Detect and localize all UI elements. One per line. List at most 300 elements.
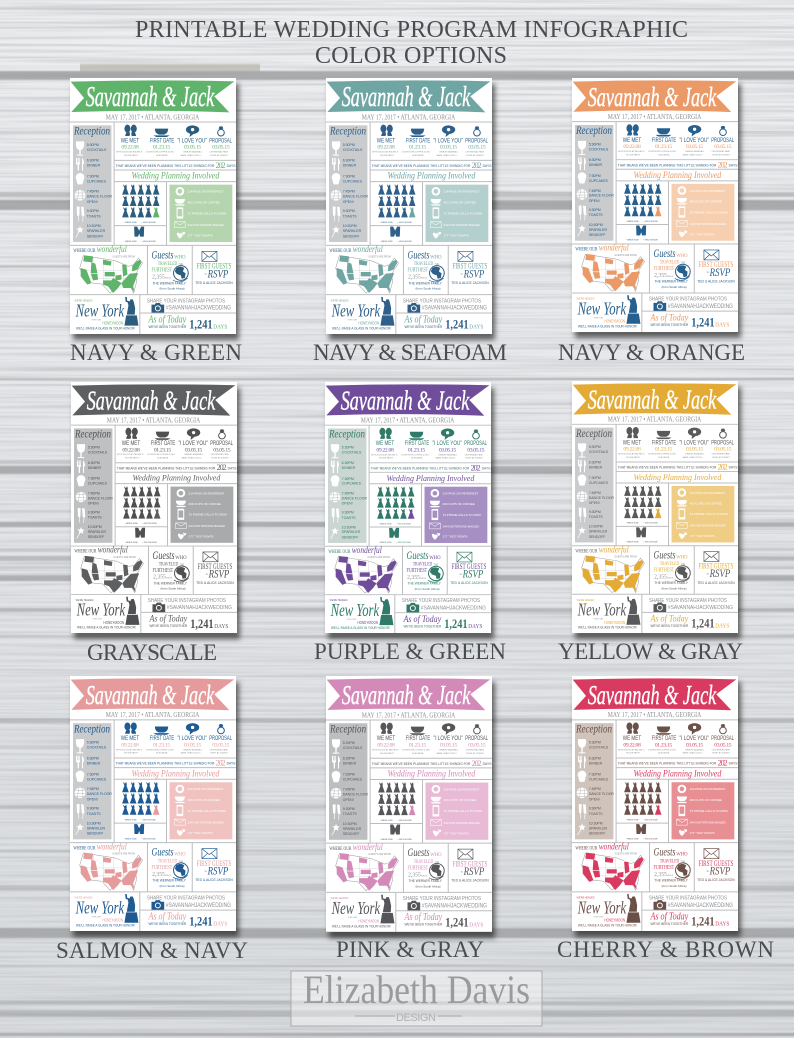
chart: groomsmen [125,528,157,544]
panel: planning stats: 177 "YES" RSVPS [689,831,714,835]
heading: wedding planning involved: Wedding Planning Involved [633,768,721,778]
days together: As of Today [649,911,688,922]
honeymoon [576,295,640,329]
panel: planning stats: 73 PHONE CALLS TO MOM [690,512,728,516]
panel: reception schedule: 5:30PM [343,741,355,745]
honeymoon: New York [330,600,380,620]
milestones: CENTENNIAL PARK [209,151,228,154]
panel: reception schedule [575,125,614,241]
chart: groomsmen: • BRIDE SIDE [125,542,138,544]
panel: reception schedule: SPARKLER [87,530,106,534]
panel: reception schedule: DINNER [341,466,355,470]
days together [403,314,483,332]
map: where guests are from: wonderful [97,546,128,556]
honeymoon: WE'LL RAISE A GLASS IN YOUR HONOR! [578,325,637,329]
milestones: FIRST DATE [151,440,175,447]
panel: reception schedule: DINNER [588,163,602,167]
panel: reception schedule: CUPCAKES [86,777,106,781]
panel: reception schedule: 10:30PM [588,223,602,227]
shindig countdown line: 202 [216,463,226,472]
panel: planning stats: 400 CUPS OF COFFEE [187,200,219,204]
guests who travelled furthest: Guests [151,249,173,261]
chart: groomsmen [124,824,156,840]
milestones: 01.23.15 [408,447,425,453]
panel: reception schedule: TOASTS [341,515,356,519]
days together [147,314,227,332]
milestones: DOWNTOWN COFFEE & DELI [146,749,174,751]
honeymoon: New York [577,600,627,620]
panel: reception schedule: DANCE FLOOR [589,496,614,500]
heading: wedding planning involved: Wedding Planning Involved [132,473,220,483]
guests who travelled furthest: Guests [152,550,175,562]
panel: reception schedule: 7:30PM [342,175,355,179]
first guests to RSVP [196,552,233,585]
milestones: RIGHT AT SUNSET [712,456,731,459]
guests who travelled furthest [407,847,444,888]
milestones: "I LOVE YOU" [434,735,463,742]
panel: reception schedule: 9:30PM [342,209,355,213]
guests who travelled furthest: FURTHEST [151,865,172,871]
first guests to RSVP: RSVP [709,566,730,580]
instagram [649,297,733,311]
panel: reception schedule: 6:30PM [589,460,601,464]
honeymoon: to [80,602,83,606]
chart: groomsmen: • BRIDE SIDE [626,541,639,543]
days together: WE'VE BEEN TOGETHER [650,323,688,327]
panel: reception schedule: DINNER [343,762,357,766]
map: where guests are from [329,244,398,293]
days together: DAYS [469,324,483,331]
guests who travelled furthest: 2,355 [408,274,421,281]
guests who travelled furthest: (from South Africa) [661,285,686,289]
guests who travelled furthest: THE WERNER FAMILY [152,281,186,285]
chart: bridesmaids: • BRIDE SIDE [124,819,137,821]
milestones: CENTENNIAL PARK [210,453,229,456]
honeymoon: WE'RE HEADED [330,299,348,302]
milestones: CENTENNIAL PARK [711,150,730,153]
milestones: 03.05.15 [714,447,732,453]
guests who travelled furthest [152,550,189,591]
milestones: RIGHT AT SUNSET [712,752,730,755]
chart: groomsmen: • GROOM SIDE [643,240,658,242]
card: cherry and brown [572,676,738,931]
panel: planning stats: 400 CUPS OF COFFEE [444,798,476,802]
panel: reception schedule: COCKTAILS [86,746,106,750]
days together: WE'VE BEEN TOGETHER [404,325,442,329]
panel: reception schedule: 7:45PM [86,787,98,791]
guests who travelled furthest: Guests [151,847,173,859]
panel: reception schedule: 5:30PM [87,446,100,450]
honeymoon: WE'RE HEADED [576,298,594,301]
milestones: CENTENNIAL PARK [466,749,485,752]
map: where guests are from [329,842,398,891]
panel: reception schedule: SENDOFF [87,535,104,539]
milestones: BRAVES BASEBALL [440,749,459,752]
milestones: CENTENNIAL PARK [464,453,483,456]
chart: groomsmen: • GROOM SIDE [643,541,658,543]
milestones: WE MET [622,735,641,742]
guests who travelled furthest [406,550,443,590]
days together: As of Today [147,911,186,922]
panel: reception schedule: 5:30PM [588,142,601,146]
first guests to RSVP: RSVP [463,864,485,878]
chart: bridesmaids: • GROOM SIDE [142,523,157,525]
first guests to RSVP [697,849,734,882]
map: where guests are from [328,546,397,593]
panel: reception schedule: 9:30PM [343,807,355,811]
panel: reception schedule [74,428,113,543]
panel: reception schedule: TOASTS [342,214,357,218]
panel: reception schedule: Reception [329,126,366,138]
milestones: 03.05.15 [468,743,486,749]
days together: WE'VE BEEN TOGETHER [148,325,186,329]
milestones: HOUSE PARTY [124,154,138,157]
panel: reception schedule: CUPCAKES [87,482,107,486]
guests who travelled furthest: THE [178,264,183,266]
panel: reception schedule: COCKTAILS [341,450,362,454]
milestones: RIGHT AT SUNSET [210,154,228,157]
honeymoon: WE'LL RAISE A GLASS IN YOUR HONOR! [76,924,134,928]
panel: planning stats: 214 PINS ON PINTEREST [442,491,478,495]
guests who travelled furthest: THE WERNER FAMILY [654,280,688,284]
guests who travelled furthest: THE [178,861,183,863]
days together: 1,241 [189,318,212,332]
guests who travelled furthest: TRAVELED [414,859,433,865]
heading: wedding planning involved: Wedding Planning Involved [386,473,474,482]
milestones: GAME, SEATS 228-14 [180,752,201,755]
days together: 1,241 [190,617,213,631]
honeymoon: to [79,899,82,903]
honeymoon: WE'RE HEADED [329,599,347,602]
milestones: RIGHT AT SUNSET [465,456,483,459]
milestones [618,124,734,156]
milestones: DOWNTOWN COFFEE & DELI [648,454,676,455]
guests who travelled furthest: 2,355 [408,871,421,878]
milestones: BRAVES BASEBALL [183,151,203,154]
first guests to RSVP: RSVP [206,864,228,878]
chart: bridesmaids [624,184,661,223]
days together: As of Today [404,912,443,923]
milestones: "I LOVE YOU" [433,137,463,144]
shindig countdown line [617,759,738,768]
milestones: CENTENNIAL PARK [465,151,484,154]
guests who travelled furthest: (from South Africa) [160,587,185,591]
guests who travelled furthest: WHO [676,555,688,560]
guests who travelled furthest: Guests [653,847,676,859]
label: cherry and brown: CHERRY & BROWN [557,937,774,962]
panel: reception schedule: OPEN! [588,199,599,203]
panel: planning stats: 214 PINS ON PINTEREST [187,787,223,791]
milestones: FIRST DATE [406,735,431,742]
first guests to RSVP: to [706,270,709,274]
milestones: DOWNTOWN COFFEE & DELI [648,151,676,153]
days together: WE'VE BEEN TOGETHER [148,922,186,926]
milestones [117,428,233,459]
first guests to RSVP: to [707,572,709,576]
milestones [116,722,232,755]
guests who travelled furthest: MILES [166,578,173,580]
panel: reception schedule: COCKTAILS [343,746,363,750]
milestones: 03.05.15 [686,742,703,748]
guests who travelled furthest: WHO [430,254,441,260]
panel: reception schedule: 5:30PM [341,445,354,449]
milestones: 01.23.15 [655,742,672,748]
milestones: WE MET [375,440,394,447]
shindig countdown line: DAYS [226,762,236,766]
days together: DAYS [213,921,227,928]
panel: planning stats [426,783,488,840]
panel: reception schedule: TOASTS [86,214,101,218]
first guests to RSVP: RSVP [206,266,228,280]
panel: planning stats [672,486,734,542]
panel: planning stats: 177 "YES" RSVPS [442,534,467,538]
days together [148,614,228,631]
milestones: 01.23.15 [655,144,672,150]
honeymoon: HONEYMOON [358,918,379,923]
first guests to RSVP: RSVP [709,864,730,878]
milestones: 03.05.15 [440,743,457,749]
milestones: FIRST DATE [406,137,430,144]
milestones: IN ATLANTA [658,456,670,459]
milestones: 01.23.15 [152,742,170,748]
days together: DAYS [715,623,730,630]
panel: reception schedule: COCKTAILS [342,148,363,152]
chart: groomsmen: • GROOM SIDE [396,542,411,544]
chart: groomsmen [380,824,412,841]
panel: reception schedule: 9:30PM [588,208,601,212]
map: where guests are from: WHERE OUR [73,249,95,254]
honeymoon: FOR OUR [594,619,603,621]
guests who travelled furthest [653,248,690,289]
milestones: 03.05.15 [439,447,456,453]
panel: planning stats: 400 CUPS OF COFFEE [689,798,721,802]
honeymoon: FOR OUR [593,317,603,319]
guests who travelled furthest: Guests [406,550,429,562]
shindig countdown line [372,759,492,768]
milestones: WE MET [623,439,641,446]
panel: planning stats: 214 PINS ON PINTEREST [444,788,480,792]
instagram [403,896,487,910]
map: where guests are from: WHERE OUR [575,846,598,851]
instagram [148,598,232,612]
milestones: "I LOVE YOU" [178,440,208,447]
label: navy and green: NAVY & GREEN [70,340,242,365]
milestones: IN ATLANTA [157,456,169,459]
panel: reception schedule: OPEN! [342,200,353,204]
map: where guests are from: WHERE OUR [328,550,351,554]
milestones: HOUSE PARTY [125,456,140,459]
panel: reception schedule: Reception [74,429,111,441]
chart: groomsmen: • GROOM SIDE [142,542,157,544]
panel: planning stats: 244 INVITATIONS MAILED [188,524,225,528]
card: navy and seafoam [326,78,492,334]
date line: MAY 17, 2017 • ATLANTA, GEORGIA [361,112,455,121]
panel: reception schedule: SPARKLER [342,229,361,233]
days together: As of Today [147,314,186,325]
chart: bridesmaids: • GROOM SIDE [141,222,156,224]
honeymoon: WE'LL RAISE A GLASS IN YOUR HONOR! [331,626,390,630]
guests who travelled furthest: WHO [429,555,440,561]
panel: planning stats: 73 PHONE CALLS TO MOM [442,513,481,517]
logo: Elizabeth Davis Design: Elizabeth Davis [303,967,530,1012]
guests who travelled furthest: THE [680,861,685,863]
milestones: BRAVES BASEBALL [685,150,705,153]
shindig countdown line: 202 [717,160,727,169]
guests who travelled furthest: Guests [407,249,430,261]
days together: As of Today [148,614,187,625]
honeymoon: WE'LL RAISE A GLASS IN YOUR HONOR! [332,924,391,928]
days together [147,911,227,929]
honeymoon: FOR OUR [593,916,603,918]
days together [650,614,730,631]
days together: 1,241 [445,318,468,332]
milestones: GAME, SEATS 228-14 [180,154,201,157]
chart: bridesmaids: • BRIDE SIDE [626,523,639,525]
honeymoon: to [335,302,338,306]
honeymoon: FOR OUR [346,619,356,621]
panel: reception schedule: DANCE FLOOR [343,793,368,797]
milestones: "I LOVE YOU" [432,440,462,447]
milestones: 01.23.15 [409,743,426,749]
map: where guests are from: WHERE OUR [329,249,352,254]
milestones: FIRST DATE [652,439,677,446]
date line: MAY 17, 2017 • ATLANTA, GEORGIA [607,112,702,121]
milestones: WE MET [121,440,140,447]
honeymoon: New York [331,300,381,320]
honeymoon: WE'LL RAISE A GLASS IN YOUR HONOR! [77,626,136,630]
honeymoon: FOR OUR [91,916,101,918]
panel: reception schedule: 6:30PM [86,756,98,760]
panel: planning stats: 73 PHONE CALLS TO MOM [444,809,482,813]
guests who travelled furthest: (from South Africa) [416,884,441,888]
honeymoon: WE'RE HEADED [576,896,595,899]
chart: groomsmen [626,824,658,840]
guests who travelled furthest: WHO [676,852,687,858]
milestones: 09.22.08 [121,145,138,151]
panel: reception schedule: Reception [329,724,366,736]
instagram [146,298,231,313]
chart: bridesmaids: • GROOM SIDE [397,820,412,822]
panel: reception schedule: 7:45PM [86,190,98,194]
panel: reception schedule: COCKTAILS [588,147,609,151]
honeymoon: WE'LL RAISE A GLASS IN YOUR HONOR! [76,327,134,331]
milestones: IN ATLANTA [156,154,168,157]
map: where guests are from: WHERE OUR [74,550,97,555]
days together: DAYS [715,921,729,928]
milestones: IN ATLANTA [412,752,424,755]
panel: reception schedule: Reception [73,126,110,138]
chart: groomsmen: • BRIDE SIDE [124,838,137,840]
map: where guests are from: wonderful [599,545,629,555]
panel: reception schedule: 6:30PM [588,756,601,760]
guests who travelled furthest: Guests [653,550,676,561]
label: navy and orange: NAVY & ORANGE [558,340,745,365]
date line: MAY 17, 2017 • ATLANTA, GEORGIA [607,710,702,719]
milestones: INTRODUCED AT RACHEL'S [372,151,399,154]
panel: planning stats: 244 INVITATIONS MAILED [187,820,224,824]
panel: planning stats: 244 INVITATIONS MAILED [187,223,224,227]
panel: reception schedule: 10:30PM [343,822,357,826]
panel: reception schedule: 5:30PM [86,143,98,147]
honeymoon: New York [331,898,381,918]
chart: bridesmaids [624,782,661,821]
guests who travelled furthest: FURTHEST [151,268,172,274]
milestones: 09.22.08 [623,742,641,748]
guests who travelled furthest: TRAVELED [157,261,177,267]
days together: WE'VE BEEN TOGETHER [404,923,443,927]
card: grayscale [71,382,237,633]
panel: reception schedule: SENDOFF [342,234,359,238]
card: pink and gray [326,676,492,932]
milestones: WE MET [120,137,139,144]
panel: reception schedule: 9:30PM [589,510,601,514]
panel: reception schedule: TOASTS [87,516,102,520]
map: where guests are from: WHERE OUR [329,847,352,852]
heading: wedding planning involved: Wedding Planning Involved [633,170,721,180]
milestones: HOUSE PARTY [626,456,641,459]
honeymoon: WE'RE HEADED [74,896,92,899]
milestones: HOUSE PARTY [626,153,641,156]
chart: bridesmaids [122,185,159,224]
guests who travelled furthest: TRAVELED [413,561,432,567]
date line: MAY 17, 2017 • ATLANTA, GEORGIA [105,710,199,719]
days together: 1,241 [189,915,212,929]
first guests to RSVP: to [461,869,463,873]
panel: reception schedule: OPEN! [87,502,98,506]
shindig countdown line [115,161,236,170]
honeymoon: WE'RE HEADED [331,897,349,900]
milestones: GAME, SEATS 228-14 [436,154,457,157]
panel: reception schedule [73,125,112,242]
milestones: DOWNTOWN COFFEE & DELI [402,152,430,154]
panel: planning stats: 244 INVITATIONS MAILED [444,821,481,825]
map: where guests are from: GUESTS ARE FROM [614,853,637,856]
label: yellow and gray: YELLOW & GRAY [558,639,743,664]
map: where guests are from: GUESTS ARE FROM [367,556,389,559]
card: navy and green [70,78,236,334]
honeymoon: FOR OUR [348,917,358,919]
milestones: 09.22.08 [623,447,641,453]
guests who travelled furthest: THE [435,862,440,864]
honeymoon [329,597,393,630]
panel: reception schedule: OPEN! [343,798,354,802]
first guests to RSVP: to [460,272,463,276]
shindig countdown line: DAYS [227,466,237,470]
panel: planning stats: 73 PHONE CALLS TO MOM [443,211,482,215]
honeymoon: HONEYMOON [103,620,124,625]
milestones: 09.22.08 [122,447,140,453]
panel: planning stats: 214 PINS ON PINTEREST [187,190,223,194]
chart: groomsmen: • GROOM SIDE [141,241,156,243]
panel: reception schedule [575,428,614,542]
milestones: WE MET [622,137,641,144]
milestones: 09.22.08 [377,145,395,151]
milestones: 09.22.08 [121,742,138,748]
date line: MAY 17, 2017 • ATLANTA, GEORGIA [362,710,456,719]
panel: planning stats: 244 INVITATIONS MAILED [442,524,478,528]
days together: 1,241 [691,316,714,330]
honeymoon: WE'LL RAISE A GLASS IN YOUR HONOR! [578,626,637,630]
milestones: CENTENNIAL PARK [209,748,228,751]
guests who travelled furthest [653,550,690,590]
milestones: "I LOVE YOU" [177,137,207,144]
days together: 1,241 [691,915,714,929]
map: where guests are from: WHERE OUR [575,248,598,253]
panel: reception schedule: 10:30PM [87,525,101,529]
panel: reception schedule: COCKTAILS [86,148,106,152]
honeymoon: New York [76,600,126,620]
chart: bridesmaids: • BRIDE SIDE [380,222,393,224]
